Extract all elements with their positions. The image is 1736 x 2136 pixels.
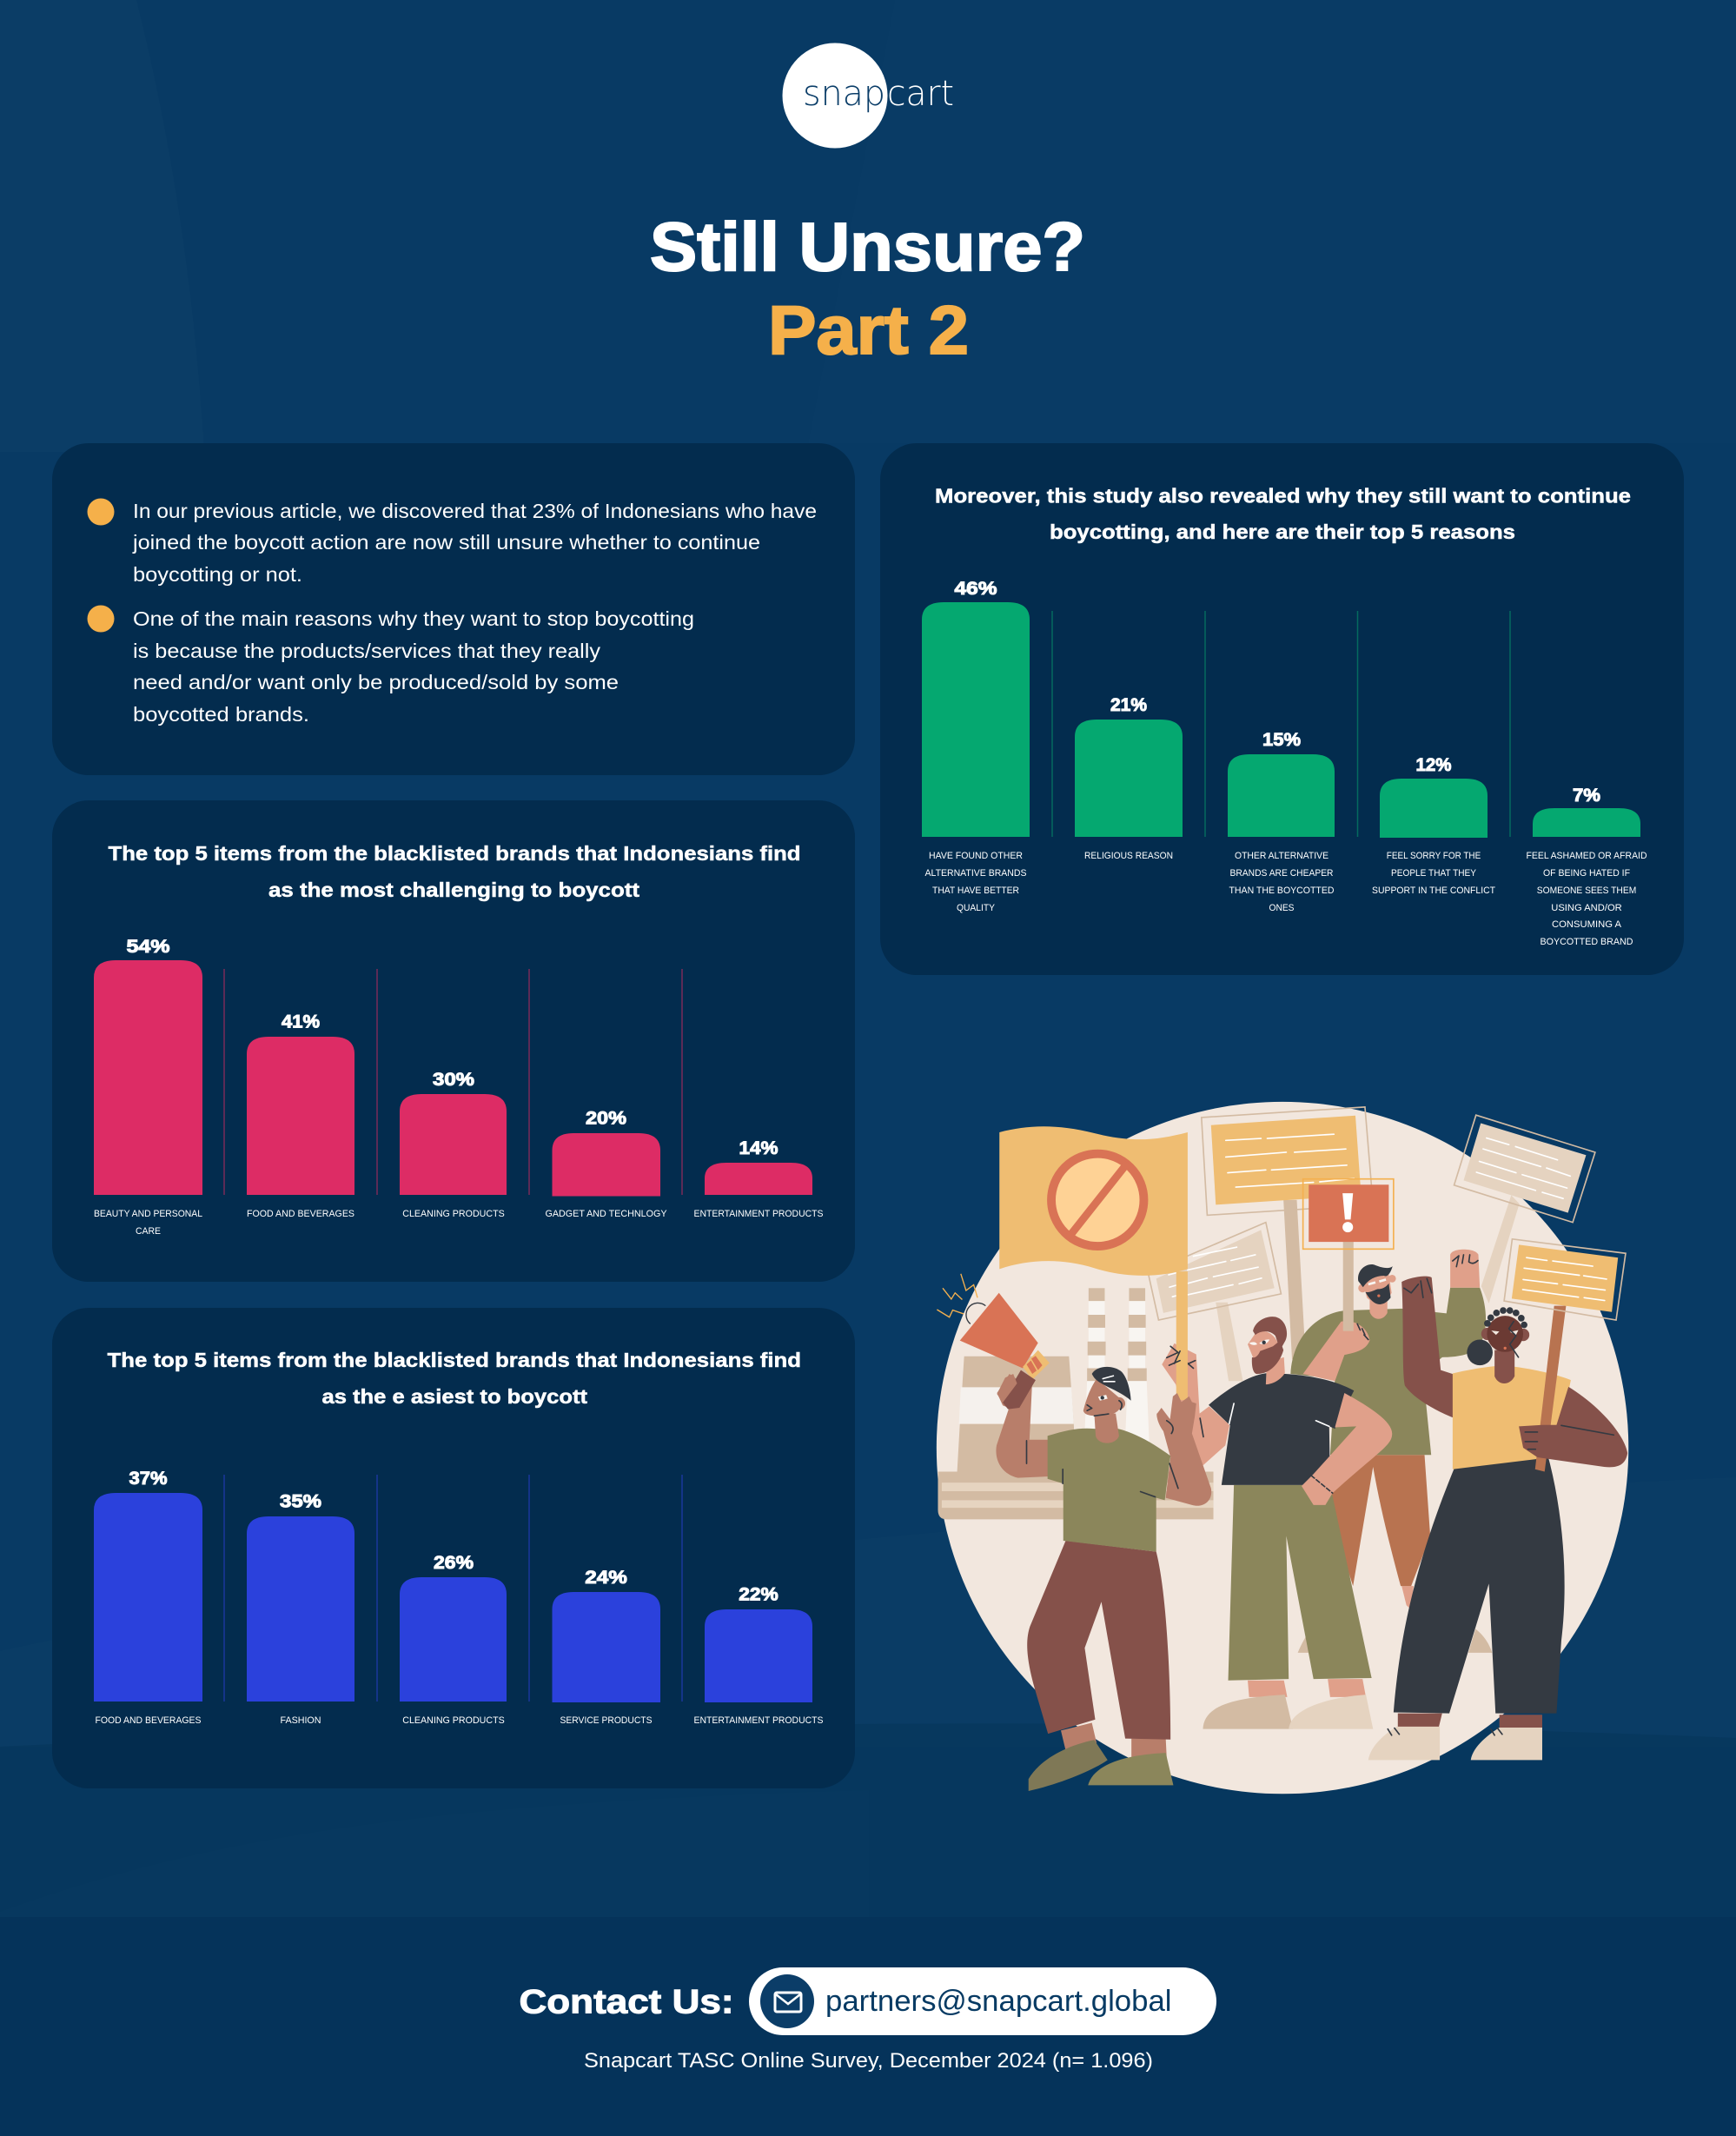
bar chart: reasons: BOYCOTTED BRAND bbox=[1540, 937, 1633, 947]
bar chart: reasons: RELIGIOUS REASON bbox=[1084, 851, 1173, 861]
bullet two bbox=[87, 605, 694, 726]
panel: challenging to boycott bbox=[52, 800, 855, 1282]
logo: snapcart: cart bbox=[887, 74, 954, 114]
heading: easiest: as the e asiest to boycott bbox=[321, 1385, 587, 1408]
bar chart: easiest: CLEANING PRODUCTS bbox=[402, 1715, 505, 1726]
heading: challenging: as the most challenging to boycott bbox=[268, 879, 639, 901]
bar chart: reasons: FEEL SORRY FOR THE bbox=[1387, 851, 1481, 861]
source note: Snapcart TASC Online Survey, December 2024 (n= 1.096) bbox=[584, 2049, 1153, 2073]
factory background bbox=[938, 1288, 1214, 1519]
logo: snapcart: snap bbox=[803, 74, 885, 114]
bar chart: reasons: SOMEONE SEES THEM bbox=[1537, 886, 1636, 896]
bullet two: is because the products/services that they really bbox=[133, 640, 601, 662]
bar chart: reasons: 7% bbox=[1573, 786, 1600, 806]
bar chart: reasons: 21% bbox=[1110, 695, 1147, 715]
sign: red warning placard bbox=[1303, 1179, 1394, 1388]
bar chart: easiest: 24% bbox=[585, 1568, 627, 1588]
contact pill bbox=[749, 1967, 1216, 2035]
person: back man with beard bbox=[1290, 1250, 1492, 1653]
bar chart: reasons: THAN THE BOYCOTTED bbox=[1229, 886, 1335, 896]
icon: envelope bbox=[760, 1974, 814, 2028]
bar chart: easiest: SERVICE PRODUCTS bbox=[560, 1715, 652, 1726]
bar chart: reasons: OTHER ALTERNATIVE bbox=[1235, 851, 1329, 861]
bullet one: boycotting or not. bbox=[133, 563, 302, 586]
bullet two: need and/or want only be produced/sold by some bbox=[133, 671, 619, 693]
sign: top right beige placard bbox=[1454, 1115, 1595, 1303]
illustration: protesters with signs bbox=[937, 1102, 1628, 1794]
title bbox=[650, 208, 1085, 368]
sign: left beige placard bbox=[1148, 1223, 1281, 1381]
bar chart: reasons: FEEL ASHAMED OR AFRAID bbox=[1526, 851, 1647, 861]
heading: reasons bbox=[935, 485, 1631, 543]
sign: flag with prohibition symbol bbox=[999, 1126, 1188, 1276]
bar chart: reasons: BRANDS ARE CHEAPER bbox=[1230, 868, 1334, 879]
bar chart: challenging: CLEANING PRODUCTS bbox=[402, 1209, 505, 1219]
person: left man with megaphone bbox=[996, 1367, 1211, 1791]
bullet one bbox=[87, 499, 817, 586]
bar chart: reasons: USING AND/OR bbox=[1551, 903, 1622, 913]
bar chart: challenging: 20% bbox=[586, 1109, 626, 1128]
bar chart: easiest: 26% bbox=[434, 1553, 474, 1573]
footer: contact us: Contact Us: bbox=[520, 1983, 733, 2021]
sign: top centre yellow placard bbox=[1202, 1107, 1373, 1360]
heading: easiest: The top 5 items from the blacklisted brands that Indonesians find bbox=[108, 1349, 801, 1371]
bar chart: reasons: QUALITY bbox=[957, 903, 996, 913]
bar chart: easiest: 35% bbox=[280, 1491, 321, 1512]
bar chart: easiest bbox=[94, 1469, 824, 1726]
logo: snapcart bbox=[782, 43, 954, 148]
bar chart: reasons: 15% bbox=[1262, 730, 1301, 750]
bullet two: boycotted brands. bbox=[133, 703, 309, 726]
bullet one: joined the boycott action are now still unsure whether to continue bbox=[132, 531, 760, 554]
bar chart: easiest: 22% bbox=[739, 1585, 779, 1604]
bar chart: reasons: 46% bbox=[954, 579, 997, 599]
bar chart: reasons: OF BEING HATED IF bbox=[1543, 868, 1630, 879]
icon: megaphone with sound bolts bbox=[937, 1274, 1050, 1380]
bar chart: challenging: BEAUTY AND PERSONAL bbox=[94, 1209, 202, 1219]
bar chart: challenging: FOOD AND BEVERAGES bbox=[247, 1209, 354, 1219]
heading: reasons: Moreover, this study also revealed why they still want to continue bbox=[935, 485, 1631, 507]
bar chart: easiest: 37% bbox=[129, 1469, 168, 1489]
bar chart: reasons: 12% bbox=[1416, 755, 1452, 775]
person: centre man with black shirt bbox=[1162, 1271, 1392, 1729]
bar chart: reasons: SUPPORT IN THE CONFLICT bbox=[1372, 886, 1495, 896]
title: Part 2 bbox=[768, 291, 969, 368]
heading: reasons: boycotting, and here are their top 5 reasons bbox=[1050, 521, 1515, 543]
bar chart: challenging: 54% bbox=[127, 937, 170, 957]
panel: reasons to continue boycotting bbox=[880, 443, 1684, 975]
bar chart: challenging bbox=[94, 937, 824, 1237]
footer: contact us bbox=[520, 1967, 1216, 2073]
bar chart: challenging: 30% bbox=[433, 1070, 474, 1090]
person: woman with yellow sign bbox=[1368, 1239, 1627, 1760]
bar chart: reasons: THAT HAVE BETTER bbox=[932, 886, 1019, 896]
bar chart: reasons: ONES bbox=[1269, 903, 1295, 913]
bar chart: reasons: PEOPLE THAT THEY bbox=[1391, 868, 1477, 879]
panel: easiest to boycott bbox=[52, 1308, 855, 1788]
panel: introduction bbox=[52, 443, 855, 775]
bar chart: challenging: ENTERTAINMENT PRODUCTS bbox=[693, 1209, 824, 1219]
bullet two: One of the main reasons why they want to stop boycotting bbox=[133, 607, 694, 630]
bar chart: easiest: ENTERTAINMENT PRODUCTS bbox=[693, 1715, 824, 1726]
contact pill: partners@snapcart.global bbox=[825, 1985, 1171, 2018]
title: Still Unsure? bbox=[650, 208, 1085, 285]
bar chart: challenging: 14% bbox=[739, 1138, 779, 1158]
heading: challenging bbox=[108, 842, 801, 901]
bar chart: reasons: HAVE FOUND OTHER bbox=[929, 851, 1023, 861]
bar chart: easiest: FASHION bbox=[280, 1715, 321, 1726]
heading: easiest bbox=[108, 1349, 801, 1408]
bar chart: easiest: FOOD AND BEVERAGES bbox=[96, 1715, 202, 1726]
bar chart: reasons: ALTERNATIVE BRANDS bbox=[924, 868, 1027, 879]
bar chart: challenging: CARE bbox=[136, 1226, 161, 1237]
bar chart: challenging: GADGET AND TECHNLOGY bbox=[546, 1209, 667, 1219]
bullet one: In our previous article, we discovered that 23% of Indonesians who have bbox=[133, 500, 817, 522]
bar chart: reasons: CONSUMING A bbox=[1552, 919, 1622, 930]
bar chart: challenging: 41% bbox=[282, 1012, 320, 1032]
heading: challenging: The top 5 items from the blacklisted brands that Indonesians find bbox=[108, 842, 801, 865]
bar chart: reasons bbox=[922, 579, 1647, 947]
